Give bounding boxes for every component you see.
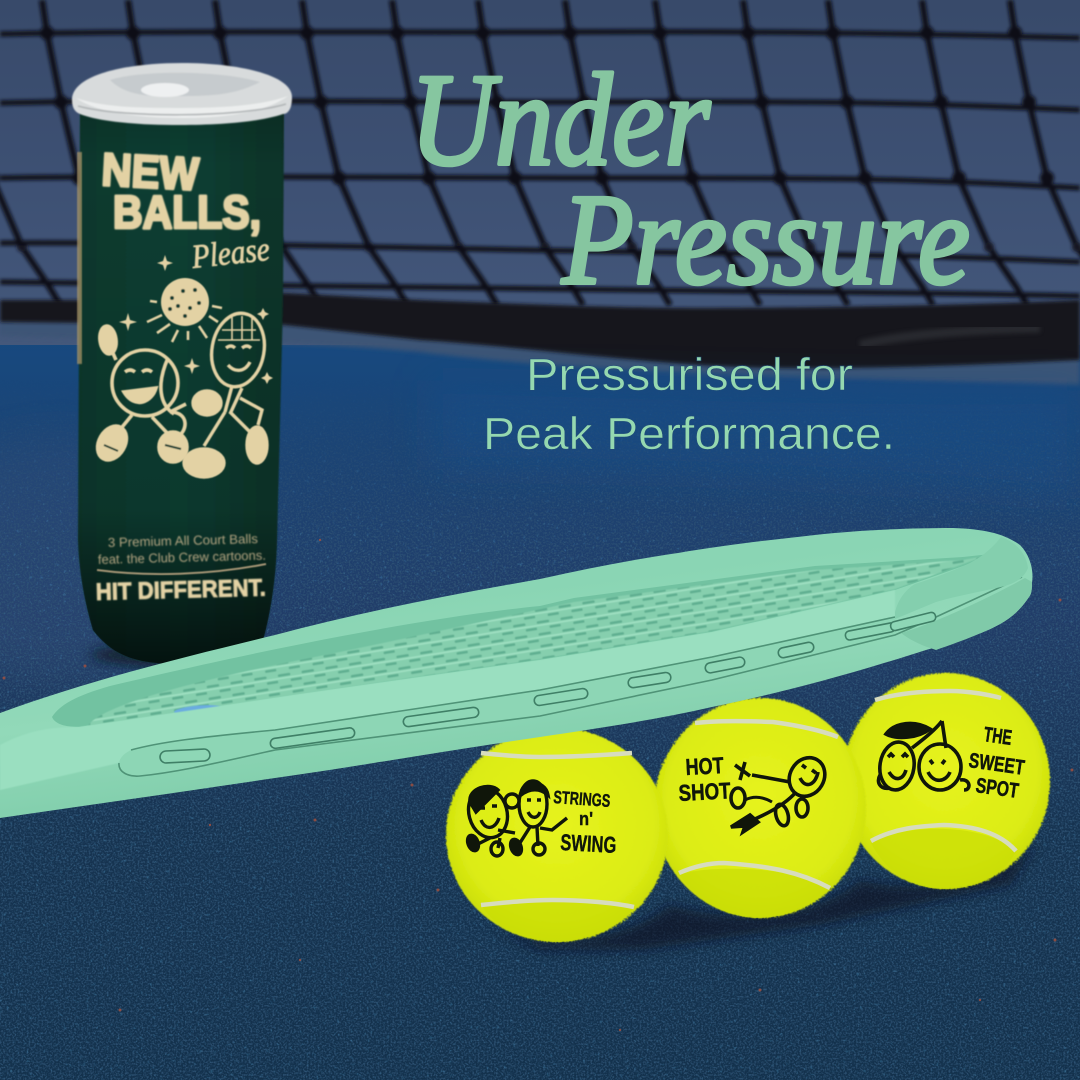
tube illustration: racket character: [184, 309, 270, 477]
tennis net: [0, 0, 1080, 305]
racket grommets: [160, 612, 937, 763]
tube illustration: sun ball: [100, 255, 273, 384]
racket head lower bumper: [901, 578, 1032, 650]
ball text: The Sweet Spot: SWEET: [967, 749, 1026, 780]
background: court surface: [0, 345, 1080, 1080]
title line: Under: Under: [410, 46, 711, 193]
ball text: Strings n' Swing: STRINGS: [553, 787, 611, 811]
ball seams: [871, 691, 1016, 851]
tube illustration: ball character: [92, 325, 187, 465]
tube print: small lines: 3 Premium All Court Balls: [108, 531, 259, 550]
ball seams: [481, 753, 634, 907]
ball text: Strings n' Swing: [553, 787, 617, 858]
tube print: heading: NEW: [100, 143, 201, 200]
ball shadows: [470, 840, 1040, 950]
cherry cartoon: [877, 721, 969, 792]
net tape band: [0, 293, 1080, 368]
ball text: Strings n' Swing: n': [579, 809, 593, 829]
ball tube: [72, 63, 292, 664]
tube print divider: [97, 564, 266, 574]
court left haze: [0, 440, 220, 680]
ball seams: [679, 721, 838, 888]
ball lower shade: [680, 869, 830, 918]
ball text: The Sweet Spot: [967, 723, 1026, 803]
ball text: Hot Shot: HOT: [685, 752, 724, 780]
tube shading: [78, 110, 284, 664]
court blue glow: [430, 380, 1080, 500]
background: net backdrop: [0, 0, 1080, 345]
court red specks: [2, 539, 1074, 1031]
tube print: heading: BALLS,: [113, 186, 261, 238]
ball text: Hot Shot: SHOT: [678, 777, 731, 806]
racket frame outer: [0, 528, 1032, 818]
racket groove fill: [119, 617, 895, 776]
racket head bumper: [895, 537, 1028, 619]
tube print: heading: [100, 143, 261, 238]
ball lower shade: [482, 901, 634, 942]
subtitle line 2: Peak Performance.: [483, 408, 895, 459]
tube side print strip: [77, 152, 82, 364]
court grey strip below net: [0, 320, 1080, 385]
tube shadow: [90, 643, 280, 667]
ball body: [842, 673, 1050, 889]
tennis racket: [0, 528, 1032, 818]
racket inner hollow: [52, 553, 1000, 727]
title: [410, 46, 970, 312]
title line: Pressure: Pressure: [561, 168, 970, 312]
tube print: small lines: [98, 531, 266, 567]
ball text: Strings n' Swing: SWING: [560, 829, 617, 858]
ball lower shade: [871, 829, 1016, 889]
subtitle line 1: Pressurised for: [526, 349, 853, 400]
tube lid: [72, 63, 292, 125]
tube print: tagline: HIT DIFFERENT.: [95, 575, 266, 606]
court grain texture: [0, 380, 1080, 1080]
tube body: [78, 110, 284, 664]
tube print: small lines: feat. the Club Crew cartoons.: [98, 548, 266, 567]
subtitle: [483, 349, 895, 459]
ball text: The Sweet Spot: SPOT: [974, 774, 1020, 803]
tennis ball: Strings n' Swing: [446, 728, 668, 942]
racket frame grooves: [119, 577, 1022, 776]
tennis ball: Hot Shot: [654, 698, 866, 918]
tube print: Please: Please: [189, 231, 271, 276]
racket frame lower light band: [0, 590, 895, 790]
ball body: [654, 698, 866, 918]
ball text: Hot Shot: [678, 752, 731, 806]
racket string bed: [88, 556, 985, 726]
ball body: [446, 728, 668, 942]
racket cartoon: [731, 751, 832, 832]
grommet blue detail: [174, 703, 222, 717]
ball text: The Sweet Spot: THE: [982, 723, 1013, 750]
tennis ball: The Sweet Spot: [842, 673, 1050, 889]
characters cartoon: [463, 781, 567, 856]
